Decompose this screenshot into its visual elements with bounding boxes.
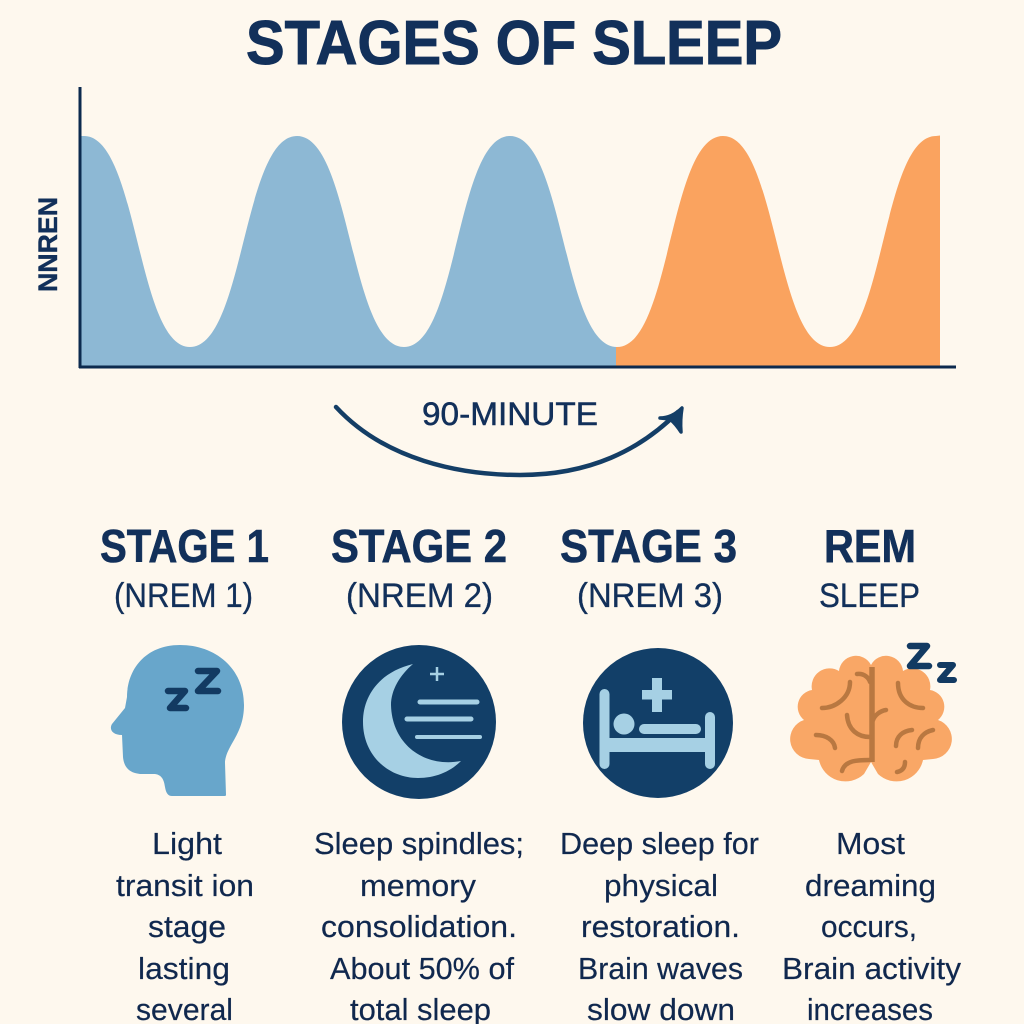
description: restoration. bbox=[581, 910, 740, 944]
description: transit ion bbox=[116, 869, 254, 903]
description: Brain waves bbox=[578, 952, 743, 986]
icon: moon bbox=[342, 645, 496, 799]
description bbox=[560, 827, 759, 1024]
subheading: (NREM 2) bbox=[346, 577, 493, 615]
description: Brain activity bbox=[782, 952, 962, 986]
description: Light bbox=[152, 827, 223, 861]
icon: brain bbox=[790, 646, 954, 781]
subheading: (NREM 1) bbox=[114, 577, 253, 615]
description: dreaming bbox=[805, 869, 936, 903]
heading: STAGE 3 bbox=[560, 520, 737, 572]
subheading: (NREM 3) bbox=[577, 577, 723, 615]
column: stage 2 bbox=[314, 520, 524, 1024]
description: memory bbox=[360, 869, 477, 903]
description bbox=[314, 827, 524, 1024]
title: STAGES OF SLEEP bbox=[246, 9, 782, 78]
NREM area bbox=[81, 136, 617, 366]
icon: head with zzz bbox=[111, 645, 244, 796]
y axis label: NNREN bbox=[33, 197, 63, 292]
description: Deep sleep for bbox=[560, 827, 759, 861]
heading: REM bbox=[824, 520, 916, 572]
description: About 50% of bbox=[330, 952, 515, 986]
REM area bbox=[616, 136, 940, 366]
description bbox=[116, 827, 254, 1024]
arrow: 90-minute cycle bbox=[336, 407, 682, 475]
description: stage bbox=[148, 910, 226, 944]
subheading: SLEEP bbox=[819, 577, 920, 615]
description: lasting bbox=[138, 952, 230, 986]
description bbox=[782, 827, 962, 1024]
description: Sleep spindles; bbox=[314, 827, 524, 861]
heading: STAGE 1 bbox=[100, 520, 269, 572]
icon: bed bbox=[583, 648, 733, 798]
cycle label: 90-MINUTE bbox=[422, 396, 598, 432]
column: stage 3 bbox=[560, 520, 759, 1024]
column: REM bbox=[782, 520, 962, 1024]
chart: sleep cycle wave bbox=[33, 87, 956, 368]
description: physical bbox=[604, 869, 718, 903]
x axis bbox=[79, 366, 956, 368]
description: consolidation. bbox=[321, 910, 517, 944]
y axis bbox=[78, 87, 82, 368]
heading: STAGE 2 bbox=[331, 520, 507, 572]
description: occurs, bbox=[821, 910, 917, 944]
column: stage 1 bbox=[100, 520, 269, 1024]
description: Most bbox=[836, 827, 906, 861]
